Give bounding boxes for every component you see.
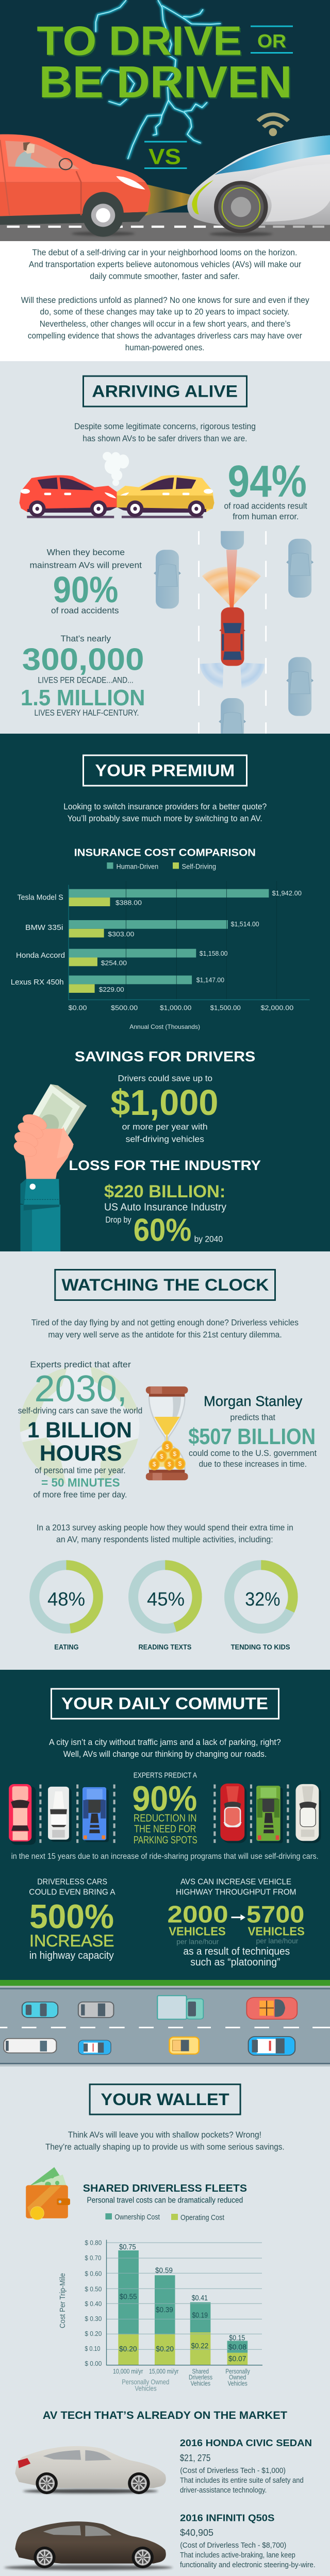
icon: hourglass with coins: $	[166, 1443, 169, 1450]
bar chart: cost per trip-mile: Shared	[192, 2368, 209, 2375]
text: Infiniti details: (Cost of Driverless Tech - $8,700)	[180, 2541, 286, 2550]
title	[37, 18, 293, 109]
donut chart: reading texts 45%	[133, 1565, 197, 1651]
text: survey intro	[37, 1522, 293, 1545]
stat: loss for the industry: $220 BILLION:	[104, 1182, 225, 1201]
stat: highway throughput: AVS CAN INCREASE VEHICLE	[180, 1877, 291, 1886]
stat: highway throughput: per lane/hour	[176, 1937, 219, 1945]
heading: your premium: YOUR PREMIUM	[95, 761, 235, 780]
bar chart: cost per trip-mile: $ 0.00	[85, 2360, 102, 2367]
bar chart: insurance cost: $1,147.00	[196, 976, 224, 984]
stat: one billion hours: = 50 MINUTES	[41, 1476, 120, 1489]
bar chart: cost per trip-mile: $0.07	[228, 2355, 246, 2363]
bar chart: insurance cost: Tesla Model S	[18, 893, 63, 902]
icon: hourglass with coins: $	[168, 1461, 171, 1468]
illustration: top-down road with sensing car	[154, 531, 314, 734]
stat: 90 percent parking reduction: THE NEED FOR	[134, 1824, 196, 1835]
bar chart: insurance cost: $254.00	[101, 959, 127, 967]
text: Honda Civic details: That includes its entire suite of safety and	[180, 2477, 304, 2485]
donut chart: eating 48%: 48%	[47, 1588, 85, 1609]
chart legend	[105, 2213, 225, 2222]
stat: 94 percent: from human error.	[233, 512, 299, 521]
text: premium intro: Looking to switch insurance providers for a better quote?	[63, 802, 267, 811]
stat: savings for drivers: SAVINGS FOR DRIVERS	[75, 1048, 255, 1064]
intro text: daily commute smoother, faster and safer.	[90, 272, 240, 281]
panel: arriving alive	[0, 361, 330, 757]
bar chart: cost per trip-mile: $ 0.30	[85, 2315, 102, 2323]
bar chart: cost per trip-mile: Owned	[229, 2374, 246, 2381]
text: premium intro: You’ll probably save much more by switching to an AV.	[68, 814, 262, 823]
bar chart: cost per trip-mile: $0.22	[191, 2342, 208, 2350]
intro text: And transportation experts believe autonomous vehicles (AVs) will make our	[29, 259, 302, 269]
stat: one billion hours	[18, 1360, 142, 1499]
arrow: 2000 to 5700	[232, 1915, 245, 1920]
text: Infiniti details: That includes active-braking, lane keep	[180, 2551, 295, 2560]
stat: 90 percent parking reduction: EXPERTS PREDICT A	[134, 1771, 197, 1780]
stat: one billion hours: 1 BILLION	[27, 1418, 132, 1443]
stat: 500 percent: in highway capacity	[29, 1950, 114, 1961]
stat: 90 percent parking reduction: PARKING SPOTS	[134, 1835, 197, 1846]
icon: hourglass with coins: $	[178, 1460, 182, 1467]
text: wallet intro: Think AVs will leave you with shallow pockets? Wrong!	[68, 2130, 261, 2140]
intro text: do, some of these changes may take up to 20 years to impact society.	[40, 307, 289, 317]
bar chart: insurance cost: $1,514.00	[231, 920, 259, 928]
text: clock intro	[31, 1318, 299, 1340]
heading: your wallet: YOUR WALLET	[101, 2090, 229, 2109]
stat: highway throughput: 2000	[167, 1901, 228, 1927]
car: Infiniti Q50S	[4, 2521, 173, 2570]
intro text: human-powered ones.	[125, 343, 205, 352]
bar chart: insurance cost: $0.00	[69, 1004, 87, 1011]
bar chart: insurance cost: $1,500.00	[210, 1004, 241, 1011]
intro text: Will these predictions unfold as planned? No one knows for sure and even if they	[21, 295, 309, 305]
stat: loss for the industry: US Auto Insurance Industry	[104, 1202, 226, 1213]
panel: header	[0, 0, 330, 241]
stat: loss for the industry	[69, 1158, 261, 1248]
stat: 90 percent parking reduction: 90%	[132, 1779, 197, 1819]
chart legend: Self-Driving	[182, 862, 216, 870]
bar chart: cost per trip-mile: Personally	[225, 2368, 250, 2375]
stat: lives saved	[21, 634, 145, 718]
stat: loss for the industry: by 2040	[194, 1234, 223, 1244]
stat: morgan stanley: Morgan Stanley	[204, 1393, 302, 1409]
text: commute intro	[49, 1737, 281, 1759]
stat: 500 percent: DRIVERLESS CARS	[37, 1878, 107, 1887]
intro text: The debut of a self-driving car in your neighborhood looms on the horizon.	[32, 247, 297, 258]
stat: 94 percent: of road accidents result	[224, 501, 307, 511]
heading: your wallet	[90, 2084, 240, 2114]
text: Honda Civic details: 2016 HONDA CIVIC SEDAN	[180, 2437, 312, 2448]
section background	[0, 734, 330, 1251]
bar chart: cost per trip-mile	[58, 2240, 262, 2393]
title: BE DRIVEN	[39, 57, 292, 107]
stat: loss for the industry: 60%	[134, 1213, 191, 1248]
text: clock intro: may very well serve as the antidote for this 21st century dilemma.	[48, 1330, 282, 1340]
stat: 90 percent: mainstream AVs will prevent	[30, 561, 142, 570]
intro text: compelling evidence that shows the advantages driverless cars may have over	[28, 331, 302, 341]
heading: watching the clock	[55, 1269, 275, 1300]
icon: wifi signal	[258, 114, 288, 136]
stat: 90 percent: of road accidents	[51, 606, 119, 616]
text: safety intro: has shown AVs to be safer drivers than we are.	[82, 433, 247, 443]
bar chart: insurance cost: BMW 335i	[25, 923, 63, 932]
stat: lives saved: LIVES PER DECADE...AND...	[38, 675, 134, 685]
bar chart: cost per trip-mile: $0.55	[120, 2293, 137, 2301]
bar chart: cost per trip-mile: $0.20	[156, 2345, 174, 2353]
chart heading: insurance cost comparison: INSURANCE COST COMPARISON	[74, 848, 256, 859]
stat: morgan stanley: predicts that	[230, 1413, 275, 1422]
text: Honda Civic details: driver-assistance technology.	[180, 2486, 267, 2495]
illustration: silver autonomous car	[187, 135, 330, 236]
section background	[0, 1670, 330, 1980]
car: Honda Civic	[15, 2446, 166, 2494]
bar chart: cost per trip-mile: $ 0.20	[85, 2330, 102, 2337]
chart heading: shared driverless fleets: SHARED DRIVERLESS FLEETS	[83, 2182, 247, 2194]
text: commute intro: Well, AVs will change our thinking by changing our roads.	[63, 1749, 267, 1759]
bar chart: cost per trip-mile: $ 0.60	[85, 2270, 102, 2278]
bar chart: cost per trip-mile: $0.08	[228, 2344, 246, 2352]
stat: savings for drivers	[75, 1048, 255, 1144]
bar chart: cost per trip-mile: $0.15	[229, 2334, 245, 2342]
bar chart: cost per trip-mile: $0.41	[192, 2294, 208, 2302]
bar chart: cost per trip-mile: Personally Owned	[122, 2378, 169, 2386]
stat: one billion hours: self-driving cars can save the world	[18, 1405, 142, 1415]
bar chart: cost per trip-mile: $ 0.10	[85, 2345, 100, 2352]
illustration: globe	[20, 1365, 142, 1489]
road	[0, 212, 330, 241]
bar chart: insurance cost: $500.00	[111, 1004, 138, 1011]
stat: loss for the industry: LOSS FOR THE INDUSTRY	[69, 1158, 261, 1173]
stat: lives saved: That’s nearly	[61, 634, 111, 643]
intro text: Nevertheless, other changes will occur in a few short years, and there’s	[40, 319, 290, 329]
stat: 90 percent: When they become	[47, 548, 125, 557]
illustration: parked cars left	[9, 1784, 117, 1845]
bar chart: insurance cost: $303.00	[108, 930, 134, 938]
heading: av tech on the market: AV TECH THAT’S ALREADY ON THE MARKET	[43, 2409, 287, 2421]
title: TO DRIVE	[38, 19, 243, 65]
bar chart: cost per trip-mile: Cost Per Trip-Mile	[58, 2273, 67, 2328]
bar chart: cost per trip-mile: $ 0.40	[85, 2300, 102, 2308]
icon: wallet with cash and coin	[26, 2167, 70, 2220]
chart legend: Human-Driven	[117, 862, 158, 870]
icon: lightning bolt	[96, 0, 221, 159]
illustration: highway with traffic	[0, 1980, 330, 2066]
traffic: upper lane cars	[22, 1996, 297, 2019]
icon: hourglass with coins	[146, 1386, 188, 1480]
bar chart: insurance cost: $1,000.00	[160, 1004, 191, 1011]
stat: savings for drivers: or more per year with	[122, 1122, 208, 1132]
bar chart: cost per trip-mile: $0.19	[192, 2312, 208, 2320]
heading: watching the clock: WATCHING THE CLOCK	[62, 1276, 269, 1294]
stat: savings for drivers: Drivers could save up to	[118, 1073, 212, 1083]
illustration: headlight beam	[145, 184, 190, 216]
heading: arriving alive: ARRIVING ALIVE	[92, 382, 238, 401]
icon: hourglass with coins: $	[173, 1450, 176, 1458]
text: wallet intro	[45, 2130, 285, 2151]
chart heading: shared driverless fleets	[83, 2182, 247, 2205]
bar chart: cost per trip-mile: $0.59	[155, 2267, 173, 2275]
stat: lives saved: LIVES EVERY HALF-CENTURY.	[34, 708, 139, 718]
stat: 90 percent parking reduction: REDUCTION IN	[134, 1813, 197, 1824]
stat: one billion hours: of more free time per day.	[33, 1489, 127, 1499]
stat: morgan stanley	[188, 1393, 317, 1469]
bar chart: insurance cost: $388.00	[116, 899, 142, 906]
section background	[0, 2066, 330, 2576]
heading: your premium	[84, 755, 246, 786]
title: OR	[257, 30, 286, 52]
donut chart: eating 48%	[35, 1565, 98, 1651]
stat: one billion hours: Experts predict that after	[30, 1360, 131, 1369]
chart legend: Operating Cost	[180, 2213, 225, 2222]
bar chart: insurance cost: $1,942.00	[272, 889, 302, 897]
donut chart: reading texts 45%: 45%	[147, 1588, 185, 1609]
VS label	[144, 141, 187, 169]
illustration: red human-driven car	[0, 134, 151, 237]
panel: your daily commute	[0, 1670, 330, 1980]
stat: 500 percent: INCREASE	[29, 1931, 114, 1950]
stat: lives saved: 300,000	[22, 642, 144, 676]
section background	[0, 361, 330, 734]
donut chart: reading texts 45%: READING TEXTS	[138, 1643, 191, 1651]
bar chart: cost per trip-mile: Vehicles	[135, 2384, 157, 2393]
stat: 90 percent: 90%	[53, 570, 118, 611]
stat: morgan stanley: due to these increases in time.	[199, 1459, 307, 1469]
stat: 500 percent	[29, 1878, 116, 1961]
text: survey intro: an AV, many respondents listed multiple activities, including:	[56, 1534, 273, 1545]
bar chart: cost per trip-mile: Vehicles	[191, 2380, 210, 2387]
text: Honda Civic details: $21, 275	[180, 2453, 210, 2463]
bar chart: cost per trip-mile: $0.20	[119, 2345, 137, 2353]
stat: savings for drivers: $1,000	[110, 1082, 219, 1123]
bar chart: insurance cost: Annual Cost (Thousands)	[129, 1023, 200, 1030]
panel: your premium	[0, 734, 330, 1251]
text: Infiniti details	[180, 2512, 316, 2569]
bar chart: insurance cost: $1,158.00	[200, 950, 228, 957]
stat: one billion hours: of personal time per year.	[35, 1466, 126, 1476]
donut chart: eating 48%: EATING	[54, 1643, 79, 1651]
text: commute intro: A city isn’t a city without traffic jams and a lack of parking, right?	[49, 1737, 281, 1747]
section background	[0, 1251, 330, 1670]
chart legend: Ownership Cost	[114, 2213, 160, 2222]
illustration: hand holding money	[11, 1084, 87, 1251]
bar chart: cost per trip-mile: $ 0.50	[85, 2286, 102, 2293]
stat: 94 percent: 94%	[228, 456, 307, 506]
stat: highway throughput: VEHICLES	[169, 1924, 226, 1938]
stat: savings for drivers: self-driving vehicles	[126, 1134, 204, 1144]
donut chart: tending to kids 32%: TENDING TO KIDS	[231, 1643, 290, 1651]
bar chart: cost per trip-mile: 15,000 mi/yr	[149, 2368, 178, 2375]
stat: highway throughput	[167, 1877, 305, 1968]
stat: lives saved: 1.5 MILLION	[21, 686, 145, 710]
text: clock intro: Tired of the day flying by and not getting enough done? Driverless vehicles	[31, 1318, 299, 1328]
text: Infiniti details: 2016 INFINITI Q50S	[180, 2512, 274, 2523]
heading: your daily commute	[52, 1689, 278, 1719]
bar chart: insurance cost: Lexus RX 450h	[11, 978, 64, 987]
heading: your daily commute: YOUR DAILY COMMUTE	[61, 1694, 268, 1713]
icon: hourglass with coins: $	[153, 1461, 156, 1468]
illustration: parked cars right	[212, 1784, 321, 1843]
text: safety intro	[74, 421, 256, 443]
text: safety intro: Despite some legitimate concerns, rigorous testing	[74, 421, 256, 431]
text: premium intro	[63, 802, 267, 823]
bar chart: cost per trip-mile: $0.75	[119, 2243, 136, 2251]
stat: morgan stanley: could come to the U.S. government	[189, 1448, 317, 1458]
stat: 94 percent	[224, 456, 307, 521]
bar chart: cost per trip-mile: $ 0.80	[85, 2240, 102, 2247]
bar chart: insurance cost: Honda Accord	[16, 951, 65, 960]
bar chart: cost per trip-mile: $0.39	[156, 2306, 173, 2314]
stat: highway throughput: per lane/hour	[256, 1937, 299, 1945]
bar chart: cost per trip-mile: Vehicles	[228, 2380, 248, 2387]
panel: your wallet	[0, 2066, 330, 2576]
title: BE DRIVEN	[40, 59, 293, 108]
text: Honda Civic details	[180, 2437, 312, 2495]
icon: hourglass with coins: $	[160, 1453, 163, 1460]
bar chart: cost per trip-mile: Driverless	[189, 2374, 212, 2381]
bar chart: insurance cost: $2,000.00	[261, 1004, 293, 1011]
header background	[0, 0, 330, 241]
panel: watching the clock	[0, 1251, 330, 1670]
stat: highway throughput: HIGHWAY THROUGHPUT FROM	[176, 1888, 296, 1896]
title: OR	[258, 31, 287, 53]
heading: arriving alive	[84, 376, 246, 406]
stat: 500 percent: COULD EVEN BRING A	[29, 1888, 116, 1897]
illustration: two crashed cars with smoke	[20, 452, 214, 518]
stat: one billion hours: 2030,	[34, 1368, 127, 1410]
stat: highway throughput: 5700	[246, 1901, 304, 1927]
bar chart: insurance cost	[11, 881, 310, 1030]
intro text	[21, 247, 309, 352]
stat: loss for the industry: Drop by	[105, 1215, 131, 1225]
stat: highway throughput: such as “platooning”	[190, 1957, 280, 1968]
title: TO DRIVE	[37, 18, 242, 63]
donut chart: tending to kids 32%: 32%	[245, 1588, 280, 1609]
donut chart: tending to kids 32%	[229, 1565, 293, 1651]
bar chart: cost per trip-mile: 10,000 mi/yr	[113, 2368, 143, 2375]
stat: highway throughput: as a result of techniques	[183, 1946, 290, 1957]
stat: 500 percent: 500%	[29, 1897, 114, 1936]
stat: 90 percent	[30, 548, 142, 616]
stat: 90 percent parking reduction	[132, 1771, 197, 1846]
text: Infiniti details: $40,905	[180, 2528, 213, 2538]
VS label: VS	[148, 144, 181, 169]
bar chart: cost per trip-mile: $ 0.70	[85, 2255, 101, 2262]
chart heading: shared driverless fleets: Personal travel costs can be dramatically reduced	[87, 2196, 243, 2205]
stat: one billion hours: HOURS	[40, 1441, 122, 1466]
bar chart: insurance cost: $229.00	[99, 986, 124, 993]
text: Honda Civic details: (Cost of Driverless Tech - $1,000)	[180, 2467, 286, 2475]
chart legend	[107, 862, 216, 870]
traffic: lower lane cars	[4, 2037, 295, 2055]
text: Infiniti details: functionality and electronic steering-by-wire.	[180, 2561, 316, 2569]
text: survey intro: In a 2013 survey asking people how they would spend their extra time in	[37, 1522, 293, 1532]
stat: highway throughput: VEHICLES	[248, 1924, 305, 1938]
text: wallet intro: They’re actually shaping up to provide us with some serious savings.	[45, 2142, 285, 2151]
